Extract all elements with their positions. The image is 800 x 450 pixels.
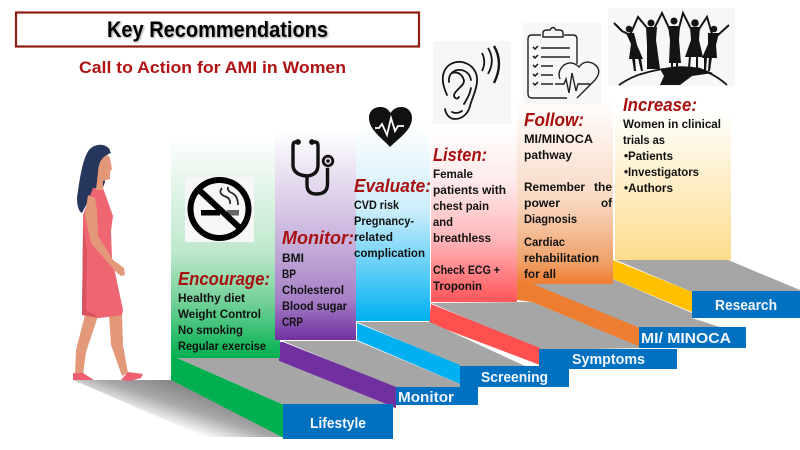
band: symptoms red	[429, 304, 540, 365]
label: Symptoms: Symptoms	[572, 352, 645, 368]
text: follow: Remember	[524, 182, 586, 194]
text: evaluate: complication	[354, 248, 425, 260]
panel: blue evaluate	[356, 125, 430, 321]
tread: screening	[357, 322, 525, 366]
text: encourage: Encourage:	[178, 269, 270, 289]
text: encourage: Healthy diet	[178, 293, 245, 305]
text: evaluate: CVD risk	[354, 200, 400, 212]
tread: lifestyle	[177, 358, 396, 408]
woman 4	[685, 19, 703, 68]
icon: ear with sound waves	[433, 41, 511, 124]
floor shadow	[73, 380, 283, 437]
front leg	[109, 315, 128, 376]
text: evaluate: Evaluate:	[354, 176, 431, 196]
label: Screening: Screening	[481, 370, 548, 386]
band: lifestyle green	[171, 351, 284, 438]
subtitle: Call to Action for AMI in Women	[79, 58, 346, 77]
face and neck	[96, 153, 112, 190]
panel: orange follow	[517, 100, 613, 284]
tread: research	[616, 260, 800, 292]
text: monitor: BMI	[282, 253, 304, 265]
panel: purple monitor	[275, 130, 356, 340]
band: research yellow	[613, 260, 692, 312]
text: listen: and	[433, 217, 453, 229]
dress	[82, 188, 123, 318]
back leg	[75, 315, 98, 375]
hair front	[90, 145, 111, 172]
woman 1	[626, 26, 643, 71]
text: follow: pathway	[524, 150, 573, 162]
label: Symptoms	[539, 349, 677, 369]
text: increase: •Investigators	[624, 167, 699, 179]
text: follow: the	[594, 182, 612, 194]
text: follow: Diagnosis	[524, 214, 577, 226]
text: monitor: Cholesterol	[282, 285, 344, 297]
text: follow: Follow:	[524, 110, 584, 130]
text: increase: Increase:	[623, 95, 697, 115]
text: evaluate: Pregnancy-	[354, 216, 414, 228]
woman figure	[73, 145, 143, 381]
text: encourage	[178, 269, 270, 353]
text: encourage: No smoking	[178, 325, 243, 337]
text: listen	[433, 145, 506, 293]
text: listen: Listen:	[433, 145, 487, 165]
text: listen: patients with	[433, 185, 506, 197]
band: MI MINOCA orange	[517, 284, 640, 347]
text: monitor: Monitor:	[282, 228, 354, 248]
text: follow: MI/MINOCA	[524, 134, 593, 146]
text: follow	[524, 110, 612, 281]
label: Monitor: Monitor	[398, 390, 454, 406]
band: monitor purple	[279, 342, 396, 408]
label: Lifestyle: Lifestyle	[310, 416, 366, 432]
text: follow: Cardiac	[524, 237, 566, 249]
woman 5	[702, 26, 719, 71]
text: listen: breathless	[433, 233, 491, 245]
raised arms	[614, 13, 729, 35]
dress shade	[82, 225, 100, 318]
text: monitor: Blood sugar	[282, 301, 348, 313]
text: listen: Female	[433, 169, 473, 181]
text: follow: rehabilitation	[524, 253, 599, 265]
text: increase: Women in clinical	[623, 119, 721, 131]
band: screening blue	[357, 323, 460, 384]
icon: women on globe	[608, 8, 735, 86]
text: evaluate	[354, 176, 431, 260]
label: MI/ MINOCA	[639, 327, 746, 348]
icon: no smoking	[185, 177, 254, 242]
text: increase: trials as	[623, 135, 665, 147]
text: follow: power	[524, 198, 561, 210]
text: evaluate: related	[354, 232, 393, 244]
woman 3	[668, 18, 681, 68]
text: listen: Troponin	[433, 281, 482, 293]
label: Monitor	[396, 387, 478, 406]
title box	[16, 12, 419, 46]
shoes	[73, 372, 143, 381]
label: Lifestyle	[283, 404, 393, 439]
text: increase: •Authors	[624, 183, 673, 195]
text: follow: of	[601, 198, 612, 210]
panel: green lifestyle	[171, 135, 280, 358]
panel: yellow research	[615, 110, 731, 260]
text: follow: for all	[524, 269, 556, 281]
panel: red listen	[431, 125, 517, 302]
hair back	[77, 145, 110, 213]
globe	[660, 66, 713, 85]
text: increase	[623, 95, 721, 195]
tread: monitor	[283, 341, 460, 388]
text: monitor: CRP	[282, 317, 303, 329]
text: listen: Check ECG +	[433, 265, 500, 277]
tread: MI MINOCA	[530, 279, 723, 346]
icon: stethoscope	[293, 141, 333, 194]
text: encourage: Weight Control	[178, 309, 261, 321]
icon: clipboard with heart	[523, 23, 601, 105]
title box: Key Recommendations	[107, 17, 328, 42]
arm	[85, 195, 125, 276]
text: increase: •Patients	[624, 151, 673, 163]
text: listen: chest pain	[433, 201, 489, 213]
icon: heart with pulse	[369, 107, 412, 147]
woman 2	[646, 20, 660, 69]
label: MI/ MINOCA: MI/ MINOCA	[641, 331, 732, 347]
label: Research	[692, 291, 800, 318]
label: Research: Research	[715, 298, 777, 314]
text: encourage: Regular exercise	[178, 341, 266, 353]
label: Screening	[460, 366, 569, 387]
text: monitor: BP	[282, 269, 296, 281]
tread: symptoms	[431, 302, 643, 350]
text: monitor	[282, 228, 354, 329]
